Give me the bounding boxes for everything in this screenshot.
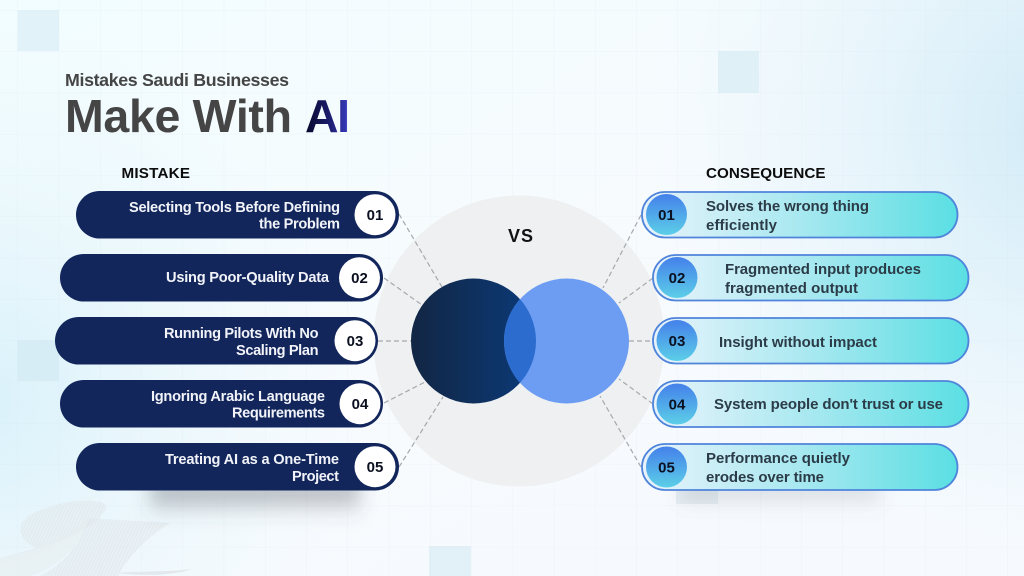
heading accent AI: AI	[305, 90, 350, 142]
consequence 01: 01	[658, 207, 675, 224]
mistake 03: 03	[347, 333, 363, 350]
decorative wave mesh	[0, 500, 192, 576]
consequence 02: 02	[669, 270, 685, 287]
mistake circle	[411, 278, 536, 404]
VS label: VS	[508, 226, 533, 246]
mistake 05: Project	[292, 469, 339, 485]
mistake 02	[60, 254, 383, 302]
central grey circle	[374, 196, 664, 486]
mistake 04: 04	[352, 396, 369, 413]
consequence 04: 04	[669, 396, 686, 414]
mistake 02: Using Poor-Quality Data	[166, 270, 330, 286]
mistake 03: Running Pilots With No	[164, 326, 319, 342]
shadow under mistake 05	[150, 482, 360, 518]
venn diagram	[411, 278, 629, 404]
mistake 04	[60, 380, 383, 428]
consequence 02: fragmented output	[725, 280, 858, 297]
mistake 01: 01	[367, 207, 383, 224]
consequence 01: efficiently	[706, 217, 778, 234]
consequence 05: Performance quietly	[706, 450, 851, 467]
consequence 05: 05	[658, 460, 675, 476]
column heading: consequence: CONSEQUENCE	[706, 165, 826, 182]
consequence 03	[653, 318, 968, 364]
consequence 04: System people don't trust or use	[714, 396, 943, 413]
mistake 05: 05	[367, 459, 383, 476]
consequence 03: Insight without impact	[719, 334, 877, 351]
mistake 01: the Problem	[259, 216, 340, 232]
mistake 05	[76, 443, 399, 490]
main heading: Make With	[65, 90, 292, 142]
consequence 03: 03	[669, 333, 685, 350]
subtitle: Mistakes Saudi Businesses	[65, 70, 289, 90]
mistake 01: Selecting Tools Before Defining	[129, 200, 340, 216]
column heading: mistake: MISTAKE	[122, 165, 190, 182]
mistake 04: Requirements	[232, 406, 325, 422]
consequence 05	[642, 444, 958, 490]
consequence 01	[642, 192, 958, 238]
mistake 03: Scaling Plan	[236, 343, 319, 359]
consequence circle	[504, 278, 629, 404]
mistake 04: Ignoring Arabic Language	[151, 389, 325, 405]
mistake 05: Treating AI as a One-Time	[165, 452, 339, 468]
mistake 01	[76, 191, 399, 238]
consequence 01: Solves the wrong thing	[706, 198, 869, 215]
consequence 02	[653, 255, 968, 300]
consequence 05: erodes over time	[706, 469, 824, 486]
consequence 02: Fragmented input produces	[725, 261, 921, 278]
title	[65, 70, 350, 142]
shadow under consequence 05	[680, 482, 880, 510]
dashed connectors	[378, 214, 653, 467]
mistake 03	[55, 317, 378, 364]
overlap	[504, 300, 536, 382]
mistake 02: 02	[351, 270, 368, 287]
consequence 04	[653, 381, 968, 427]
